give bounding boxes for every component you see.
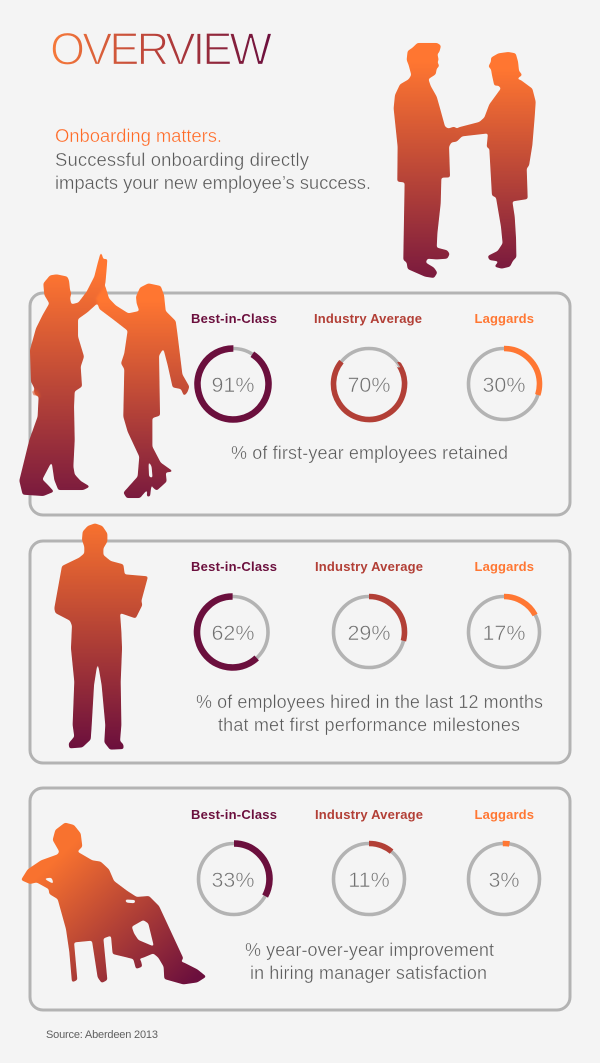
panel border bbox=[30, 788, 570, 1010]
caption bbox=[196, 692, 543, 735]
source note: Source: Aberdeen 2013 bbox=[46, 1029, 158, 1041]
column label: laggards: Laggards bbox=[474, 311, 534, 326]
caption: % year-over-year improvement bbox=[245, 940, 494, 960]
icon: man standing with laptop bbox=[54, 523, 148, 750]
donut: 33% bbox=[198, 844, 270, 914]
icon: two people high-fiving bbox=[19, 251, 189, 498]
donut: 70%: 70% bbox=[347, 373, 391, 397]
donut: 30% bbox=[468, 348, 540, 420]
donut: 17% bbox=[468, 596, 540, 668]
panel border bbox=[30, 541, 570, 763]
caption: that met first performance milestones bbox=[218, 715, 520, 735]
column label: best-in-class: Best-in-Class bbox=[191, 311, 277, 326]
caption: % of first-year employees retained bbox=[231, 443, 508, 463]
intro text: impacts your new employee’s success. bbox=[55, 172, 371, 193]
panel: performance milestones bbox=[30, 541, 570, 763]
caption bbox=[245, 940, 494, 983]
donut: 30%: 30% bbox=[482, 373, 526, 397]
donut: 11% bbox=[334, 844, 404, 914]
donut: 29%: 29% bbox=[347, 621, 391, 645]
panel: first-year retention bbox=[30, 293, 570, 515]
donut: 29% bbox=[334, 596, 404, 668]
donut: 91%: 91% bbox=[211, 373, 255, 397]
panel border bbox=[30, 293, 570, 515]
donut: 62%: 62% bbox=[211, 621, 255, 645]
intro text: Onboarding matters. bbox=[55, 125, 222, 146]
caption: % of employees hired in the last 12 months bbox=[196, 692, 543, 712]
donut: 70% bbox=[320, 335, 418, 433]
column label: industry average: Industry Average bbox=[315, 559, 423, 574]
icon: man sitting on chair bbox=[21, 823, 206, 984]
intro text bbox=[55, 125, 371, 193]
caption: in hiring manager satisfaction bbox=[250, 963, 487, 983]
column label: best-in-class: Best-in-Class bbox=[191, 807, 277, 822]
column label: industry average: Industry Average bbox=[314, 311, 422, 326]
icon: two people shaking hands bbox=[394, 43, 536, 278]
donut: 11%: 11% bbox=[348, 868, 390, 892]
donut: 3% bbox=[467, 842, 541, 916]
donut: 33%: 33% bbox=[211, 868, 255, 892]
donut: 17%: 17% bbox=[482, 621, 526, 645]
donut: 62% bbox=[182, 582, 283, 682]
column label: laggards: Laggards bbox=[474, 807, 534, 822]
donut: 3%: 3% bbox=[488, 868, 520, 892]
title: OVERVIEW bbox=[50, 24, 273, 74]
donut: 91% bbox=[184, 335, 282, 433]
column label: best-in-class: Best-in-Class bbox=[191, 559, 277, 574]
column label: industry average: Industry Average bbox=[315, 807, 423, 822]
intro text: Successful onboarding directly bbox=[55, 149, 310, 170]
panel: hiring manager satisfaction bbox=[30, 788, 570, 1010]
column label: laggards: Laggards bbox=[474, 559, 534, 574]
